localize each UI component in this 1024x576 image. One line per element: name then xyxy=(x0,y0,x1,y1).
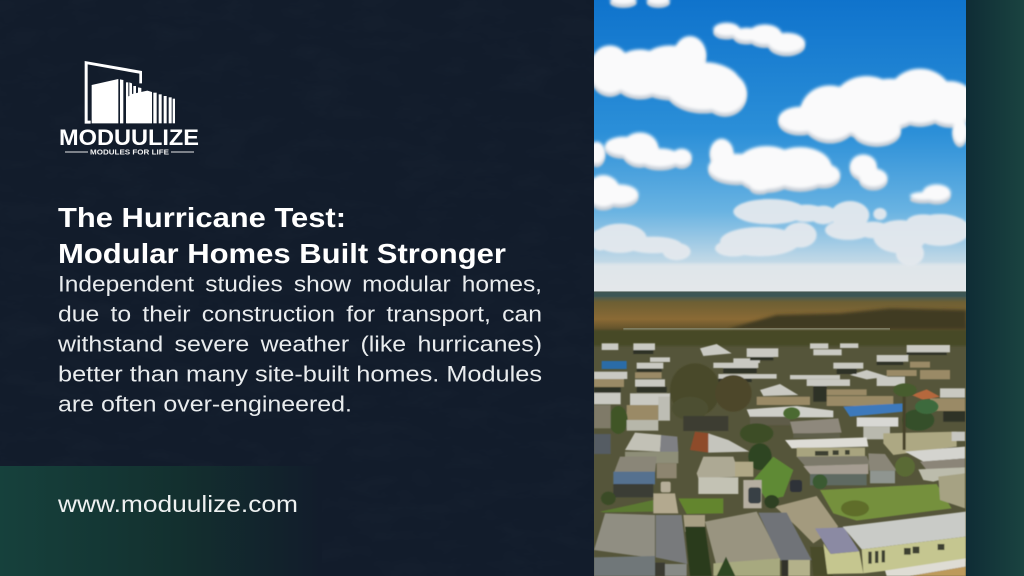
cars and palms xyxy=(748,487,761,503)
heading: Modular Homes Built Stronger xyxy=(58,238,506,269)
heading xyxy=(58,202,506,269)
text block: body paragraph: Independent studies show modular homes, xyxy=(58,272,542,296)
trees mid xyxy=(670,363,720,417)
bottom houses xyxy=(594,513,655,558)
photo: aerial view of homes under blue sky xyxy=(587,0,975,576)
icon: building outline with striped blocks xyxy=(85,61,175,124)
text block: body paragraph xyxy=(57,272,542,416)
text block: body paragraph: due to their construction for transport, can xyxy=(58,302,542,326)
logo: Moduulize xyxy=(59,61,199,156)
website url: www.moduulize.com xyxy=(57,491,298,517)
neighbourhood ground and houses xyxy=(590,292,970,576)
lawns and drives xyxy=(753,457,793,500)
sky with clouds xyxy=(587,0,975,293)
panel: right green strip xyxy=(966,0,1024,576)
panel: footer gradient band xyxy=(0,466,322,576)
heading: The Hurricane Test: xyxy=(58,202,346,233)
text block: body paragraph: better than many site-built homes. Modules xyxy=(58,362,542,386)
row 3 houses xyxy=(625,433,662,452)
far rows xyxy=(594,343,965,405)
text block: body paragraph: withstand severe weather (like hurricanes) xyxy=(57,332,542,356)
text block: body paragraph: are often over-engineered. xyxy=(58,392,352,416)
wordmark: MODUULIZE xyxy=(59,125,199,150)
tagline: MODULES FOR LIFE xyxy=(90,150,169,156)
